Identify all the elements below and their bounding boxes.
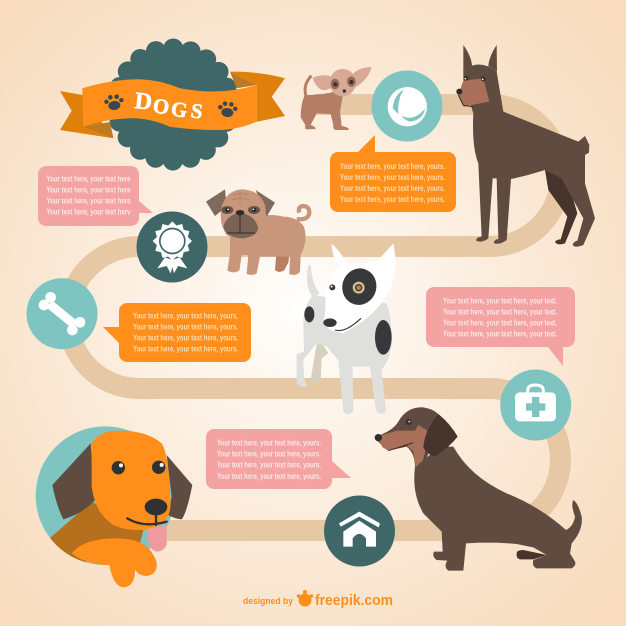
callout: pink right: Your text here, your text here, your text. [443,308,557,316]
callout: pink right: Your text here, your text here, your text. [443,296,557,306]
callout: orange middle: Your text here, your text here, yours. [133,322,238,331]
icon: left paw [104,94,124,111]
dog: doberman [456,45,595,247]
callout: pink top left: Your text here, your text here [46,174,131,184]
callout: pink bottom [206,429,351,489]
title text [133,88,205,124]
callout: orange top: Your text here, your text here, yours. [340,195,445,204]
icon: medical kit [500,370,571,440]
callout: pink top left: Your text here, your text herv [46,208,131,216]
ribbon left tail [60,91,113,138]
dog: chihuahua [301,67,372,130]
callout: orange top [330,135,456,212]
scalloped seal [115,46,231,162]
winding path [68,104,561,530]
callout: pink bottom: Your text here, your text here, yours. [217,472,321,481]
callout: pink right: Your text here, your text here, your text. [443,330,557,339]
title badge [60,46,285,162]
credit line: freepik.com [315,593,393,609]
callout: orange top: Your text here, your text here, yours. [340,184,445,193]
icon: medal [136,212,208,282]
callout: orange middle: Your text here, your text here, yours. [133,334,238,342]
callout: orange middle: Your text here, your text here, yours. [133,344,238,354]
icon: freepik logo [297,590,313,606]
callout: pink right: Your text here, your text here, your text. [443,318,557,328]
icon: dog house [324,496,395,566]
callout: pink top left: Your text here, your text here [46,196,131,206]
dog: orange puppy portrait [36,426,192,587]
icon: ball [372,70,442,142]
callout: pink top left: Your text here, your text here [46,186,131,194]
callout: orange middle [103,303,251,362]
title text: S [189,98,205,124]
callout: pink top left [38,166,153,226]
callout: orange top: Your text here, your text here, yours. [340,173,445,182]
callout: pink bottom: Your text here, your text here, yours. [217,450,321,458]
ribbon main [82,79,257,130]
dog: dachshund [375,407,582,571]
callout: orange top: Your text here, your text here, yours. [340,162,445,171]
callout: pink bottom: Your text here, your text here, yours. [217,438,321,448]
title text: D [133,88,153,116]
callout: orange middle: Your text here, your text here, yours. [133,311,238,320]
credit line [243,590,393,609]
ribbon right tail [230,72,285,122]
credit line: designed by [243,596,293,606]
icon: right paw [217,101,238,118]
title text: G [169,96,189,123]
callout: pink right [426,287,575,366]
dog: pug [206,189,309,275]
icon: bone [26,278,98,349]
dog: bull terrier [297,243,395,414]
callout: pink bottom: Your text here, your text here, yours. [217,460,321,470]
title text: O [151,93,171,119]
